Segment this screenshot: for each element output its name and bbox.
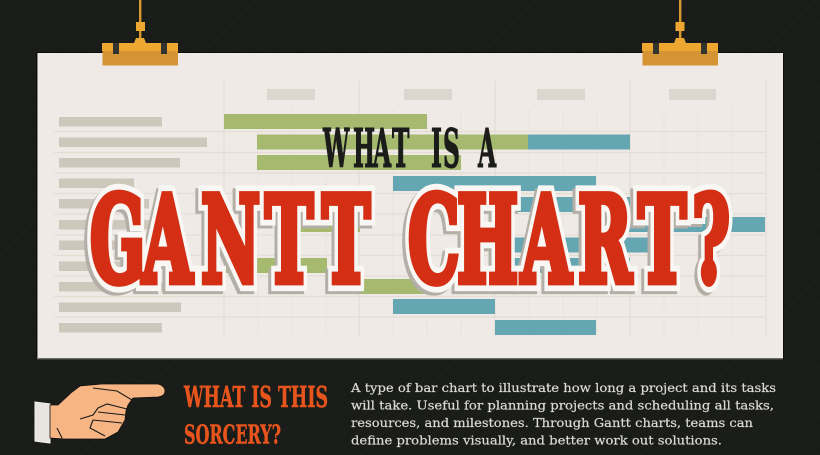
description text: resources, and milestones. Through Gantt charts, teams can [351, 416, 753, 430]
description text: define problems visually, and better work out solutions. [351, 434, 722, 448]
description text: will take. Useful for planning projects and scheduling all tasks, [351, 398, 774, 412]
title red letter layer: GANTTCHART? [90, 170, 730, 311]
icon: right hanging clip [642, 0, 718, 66]
icon: left hanging clip [102, 0, 178, 66]
icon: pointing hand [35, 384, 165, 443]
teal task bars [393, 134, 765, 335]
panel: gantt chart board [36, 52, 784, 360]
description text [350, 381, 776, 448]
green task bars [224, 114, 528, 294]
title white outline layer: GANTTCHART? [90, 170, 730, 311]
heading: what is this sorcery [183, 380, 328, 450]
heading: what is this sorcery: WHAT IS THIS [183, 380, 328, 414]
heading: what is this sorcery: SORCERY? [184, 419, 281, 450]
task label bars [59, 117, 207, 332]
title: what is a: WHATISA [322, 117, 497, 180]
column header bars [267, 89, 716, 100]
title: gantt chart? [87, 170, 730, 314]
description text: A type of bar chart to illustrate how long a project and its tasks [350, 381, 776, 395]
title shadow layer: GANTTCHART? [87, 173, 727, 314]
